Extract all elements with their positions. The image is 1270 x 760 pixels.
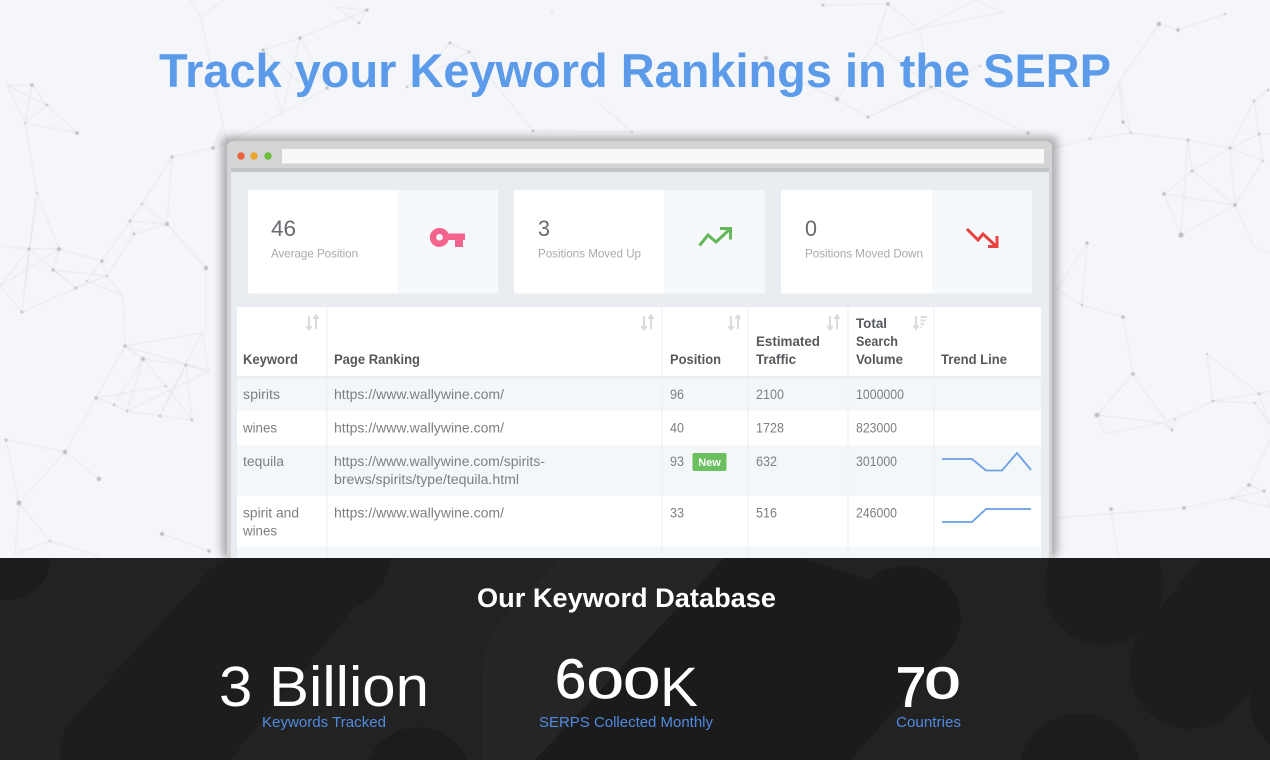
stat card: positions moved up: Positions Moved Up bbox=[538, 246, 641, 260]
table header row bbox=[243, 316, 1007, 367]
table header row: Trend Line bbox=[941, 352, 1007, 367]
table header row: Total bbox=[856, 316, 887, 331]
window controls bbox=[237, 152, 272, 160]
table rows: wines bbox=[242, 420, 277, 436]
table rows: 1728 bbox=[756, 420, 784, 436]
table rows: 823000 bbox=[856, 420, 897, 436]
table header row: Estimated bbox=[756, 334, 820, 349]
table rows: https://www.wallywine.com/ bbox=[334, 420, 504, 436]
table rows: https://www.wallywine.com/spirits- bbox=[334, 454, 545, 469]
icon: key bbox=[430, 228, 465, 247]
stat: 70 countries: 0 bbox=[925, 659, 960, 708]
sort icons bbox=[306, 316, 927, 330]
stat: 600K serps collected monthly: 00 bbox=[587, 659, 660, 708]
table header row: Traffic bbox=[756, 352, 796, 367]
panel: keyword database bbox=[0, 558, 1270, 760]
table rows: spirit and bbox=[243, 506, 299, 520]
table rows: brews/spirits/type/tequila.html bbox=[334, 472, 519, 487]
heading: our keyword database: Our Keyword Database bbox=[477, 583, 776, 613]
table header row: Page Ranking bbox=[334, 352, 420, 367]
table header row: Search bbox=[856, 334, 898, 349]
table rows: spirits bbox=[243, 387, 280, 402]
table rows: https://www.wallywine.com/ bbox=[334, 387, 504, 402]
stat: 600K serps collected monthly bbox=[539, 647, 713, 731]
stat: 3 billion keywords tracked: Keywords Tracked bbox=[262, 714, 386, 731]
stat card: positions moved down: 0 bbox=[805, 216, 817, 241]
table rows: 93 bbox=[670, 454, 684, 469]
icon: trending up arrow bbox=[700, 228, 730, 246]
icon: trending down arrow bbox=[967, 229, 997, 246]
title: Track your Keyword Rankings in the SERP bbox=[159, 44, 1111, 97]
stat: 600K serps collected monthly: 6 bbox=[555, 647, 586, 710]
stat card: positions moved up: 3 bbox=[538, 216, 550, 241]
table header row: Position bbox=[670, 352, 721, 367]
table rows: 246000 bbox=[856, 506, 897, 520]
stat: 3 billion keywords tracked: 3 Billion bbox=[219, 655, 429, 719]
stat card: average position: 46 bbox=[271, 216, 296, 241]
stat card: positions moved down bbox=[781, 190, 1032, 294]
stat: 600K serps collected monthly: K bbox=[660, 655, 698, 718]
address bar bbox=[282, 149, 1044, 164]
stat: 70 countries: 7 bbox=[896, 655, 926, 718]
badge: new: New bbox=[698, 457, 721, 469]
table rows: wines bbox=[242, 524, 277, 538]
table rows: tequila bbox=[243, 454, 284, 469]
badge: new bbox=[692, 453, 726, 471]
sparkline: spirit and wines trend bbox=[942, 509, 1031, 522]
table header row: Keyword bbox=[243, 352, 298, 367]
keyword rankings table bbox=[237, 307, 1041, 558]
stat card: positions moved up bbox=[514, 190, 765, 294]
background: network pattern bbox=[0, 0, 1270, 557]
background: dark rounded shapes bbox=[0, 558, 1270, 760]
browser window mockup bbox=[221, 136, 1058, 558]
table rows: 2100 bbox=[756, 387, 784, 402]
table rows: 40 bbox=[670, 420, 684, 436]
table rows: 1000000 bbox=[856, 387, 904, 402]
table rows: 33 bbox=[670, 506, 684, 520]
table rows: 516 bbox=[756, 506, 777, 520]
stat card: average position bbox=[248, 190, 498, 294]
stat: 70 countries: Countries bbox=[896, 714, 961, 731]
table rows: 301000 bbox=[856, 454, 897, 469]
table rows: 96 bbox=[670, 387, 684, 402]
table rows: https://www.wallywine.com/ bbox=[334, 506, 504, 520]
table rows: 632 bbox=[756, 454, 777, 469]
stat card: positions moved down: Positions Moved Down bbox=[805, 246, 923, 260]
stat: 600K serps collected monthly: SERPS Collected Monthly bbox=[539, 714, 713, 731]
stat card: average position: Average Position bbox=[271, 246, 358, 260]
table header row: Volume bbox=[856, 352, 903, 367]
sparkline: tequila trend bbox=[942, 453, 1031, 470]
stat: 70 countries bbox=[896, 655, 961, 731]
table rows bbox=[242, 387, 904, 538]
